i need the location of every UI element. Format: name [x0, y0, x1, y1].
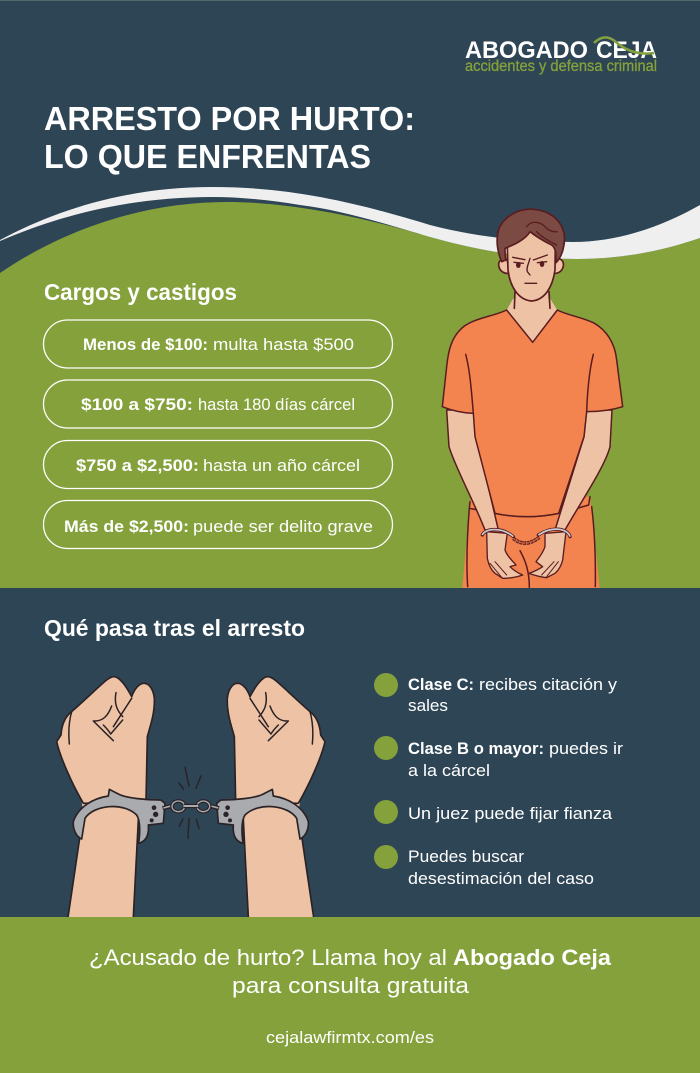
title	[44, 101, 415, 176]
logo: Abogado Ceja	[465, 37, 657, 75]
section: despues del arresto	[0, 588, 700, 917]
white wave ribbon	[0, 187, 700, 259]
call to action text: para consulta gratuita	[232, 973, 470, 998]
icon: sparks	[179, 767, 201, 838]
bullet: desestimacion: Puedes buscar	[408, 848, 525, 866]
pill: $100 a $750: hasta 180 días cárcel	[198, 395, 355, 414]
illustration: man in orange uniform	[442, 209, 623, 588]
bullet: clase b: a la cárcel	[408, 762, 490, 780]
pill: $750 a $2,500: hasta un año cárcel	[203, 456, 360, 475]
bullet: fianza: Un juez puede fijar fianza	[408, 805, 613, 823]
heading: cargos y castigos: Cargos y castigos	[44, 279, 237, 305]
bullet: clase c: Clase C:	[408, 676, 474, 694]
bullet: clase c	[374, 673, 618, 715]
pill: $100 a $750: $100 a $750:	[81, 395, 193, 414]
illustration: handcuffed hands	[57, 677, 325, 917]
bullet: clase b: Clase B o mayor:	[408, 740, 544, 758]
title: ARRESTO POR HURTO:	[44, 101, 415, 138]
bullet: clase c: recibes citación y	[479, 676, 618, 694]
logo: Abogado Ceja: accidentes y defensa criminal	[465, 58, 657, 75]
pill: mas de $2,500: puede ser delito grave	[193, 517, 373, 536]
logo: Abogado Ceja: CEJA	[596, 37, 657, 64]
bullet: clase c: sales	[408, 697, 448, 715]
pill: mas de $2,500	[44, 500, 392, 548]
pill: $100 a $750	[44, 380, 392, 428]
pill: menos de $100	[44, 320, 392, 368]
pill: menos de $100: Menos de $100:	[83, 335, 208, 354]
website url: cejalawfirmtx.com/es	[266, 1028, 434, 1047]
call to action text: ¿Acusado de hurto? Llama hoy al	[89, 945, 447, 970]
panel: call to action footer	[0, 917, 700, 1073]
panel: bullet list	[374, 673, 624, 888]
call to action text: Abogado Ceja	[453, 945, 612, 970]
chain link	[184, 799, 198, 812]
call to action text	[89, 945, 612, 998]
bullet: desestimacion	[374, 845, 594, 888]
pill: $750 a $2,500: $750 a $2,500:	[76, 456, 199, 475]
pill: mas de $2,500: Más de $2,500:	[64, 517, 189, 536]
pill: menos de $100: multa hasta $500	[213, 335, 354, 354]
logo: Abogado Ceja: ABOGADO	[465, 37, 588, 64]
green wave background	[0, 202, 700, 588]
bullet: desestimacion: desestimación del caso	[408, 870, 594, 888]
panel: penalty list	[44, 320, 392, 548]
bullet: clase b: puedes ir	[549, 740, 624, 758]
pill: $750 a $2,500	[44, 440, 392, 488]
heading: que pasa tras el arresto: Qué pasa tras el arresto	[44, 615, 305, 641]
bullet: fianza	[374, 800, 613, 824]
title: LO QUE ENFRENTAS	[44, 139, 371, 176]
bullet: clase b	[374, 736, 624, 780]
